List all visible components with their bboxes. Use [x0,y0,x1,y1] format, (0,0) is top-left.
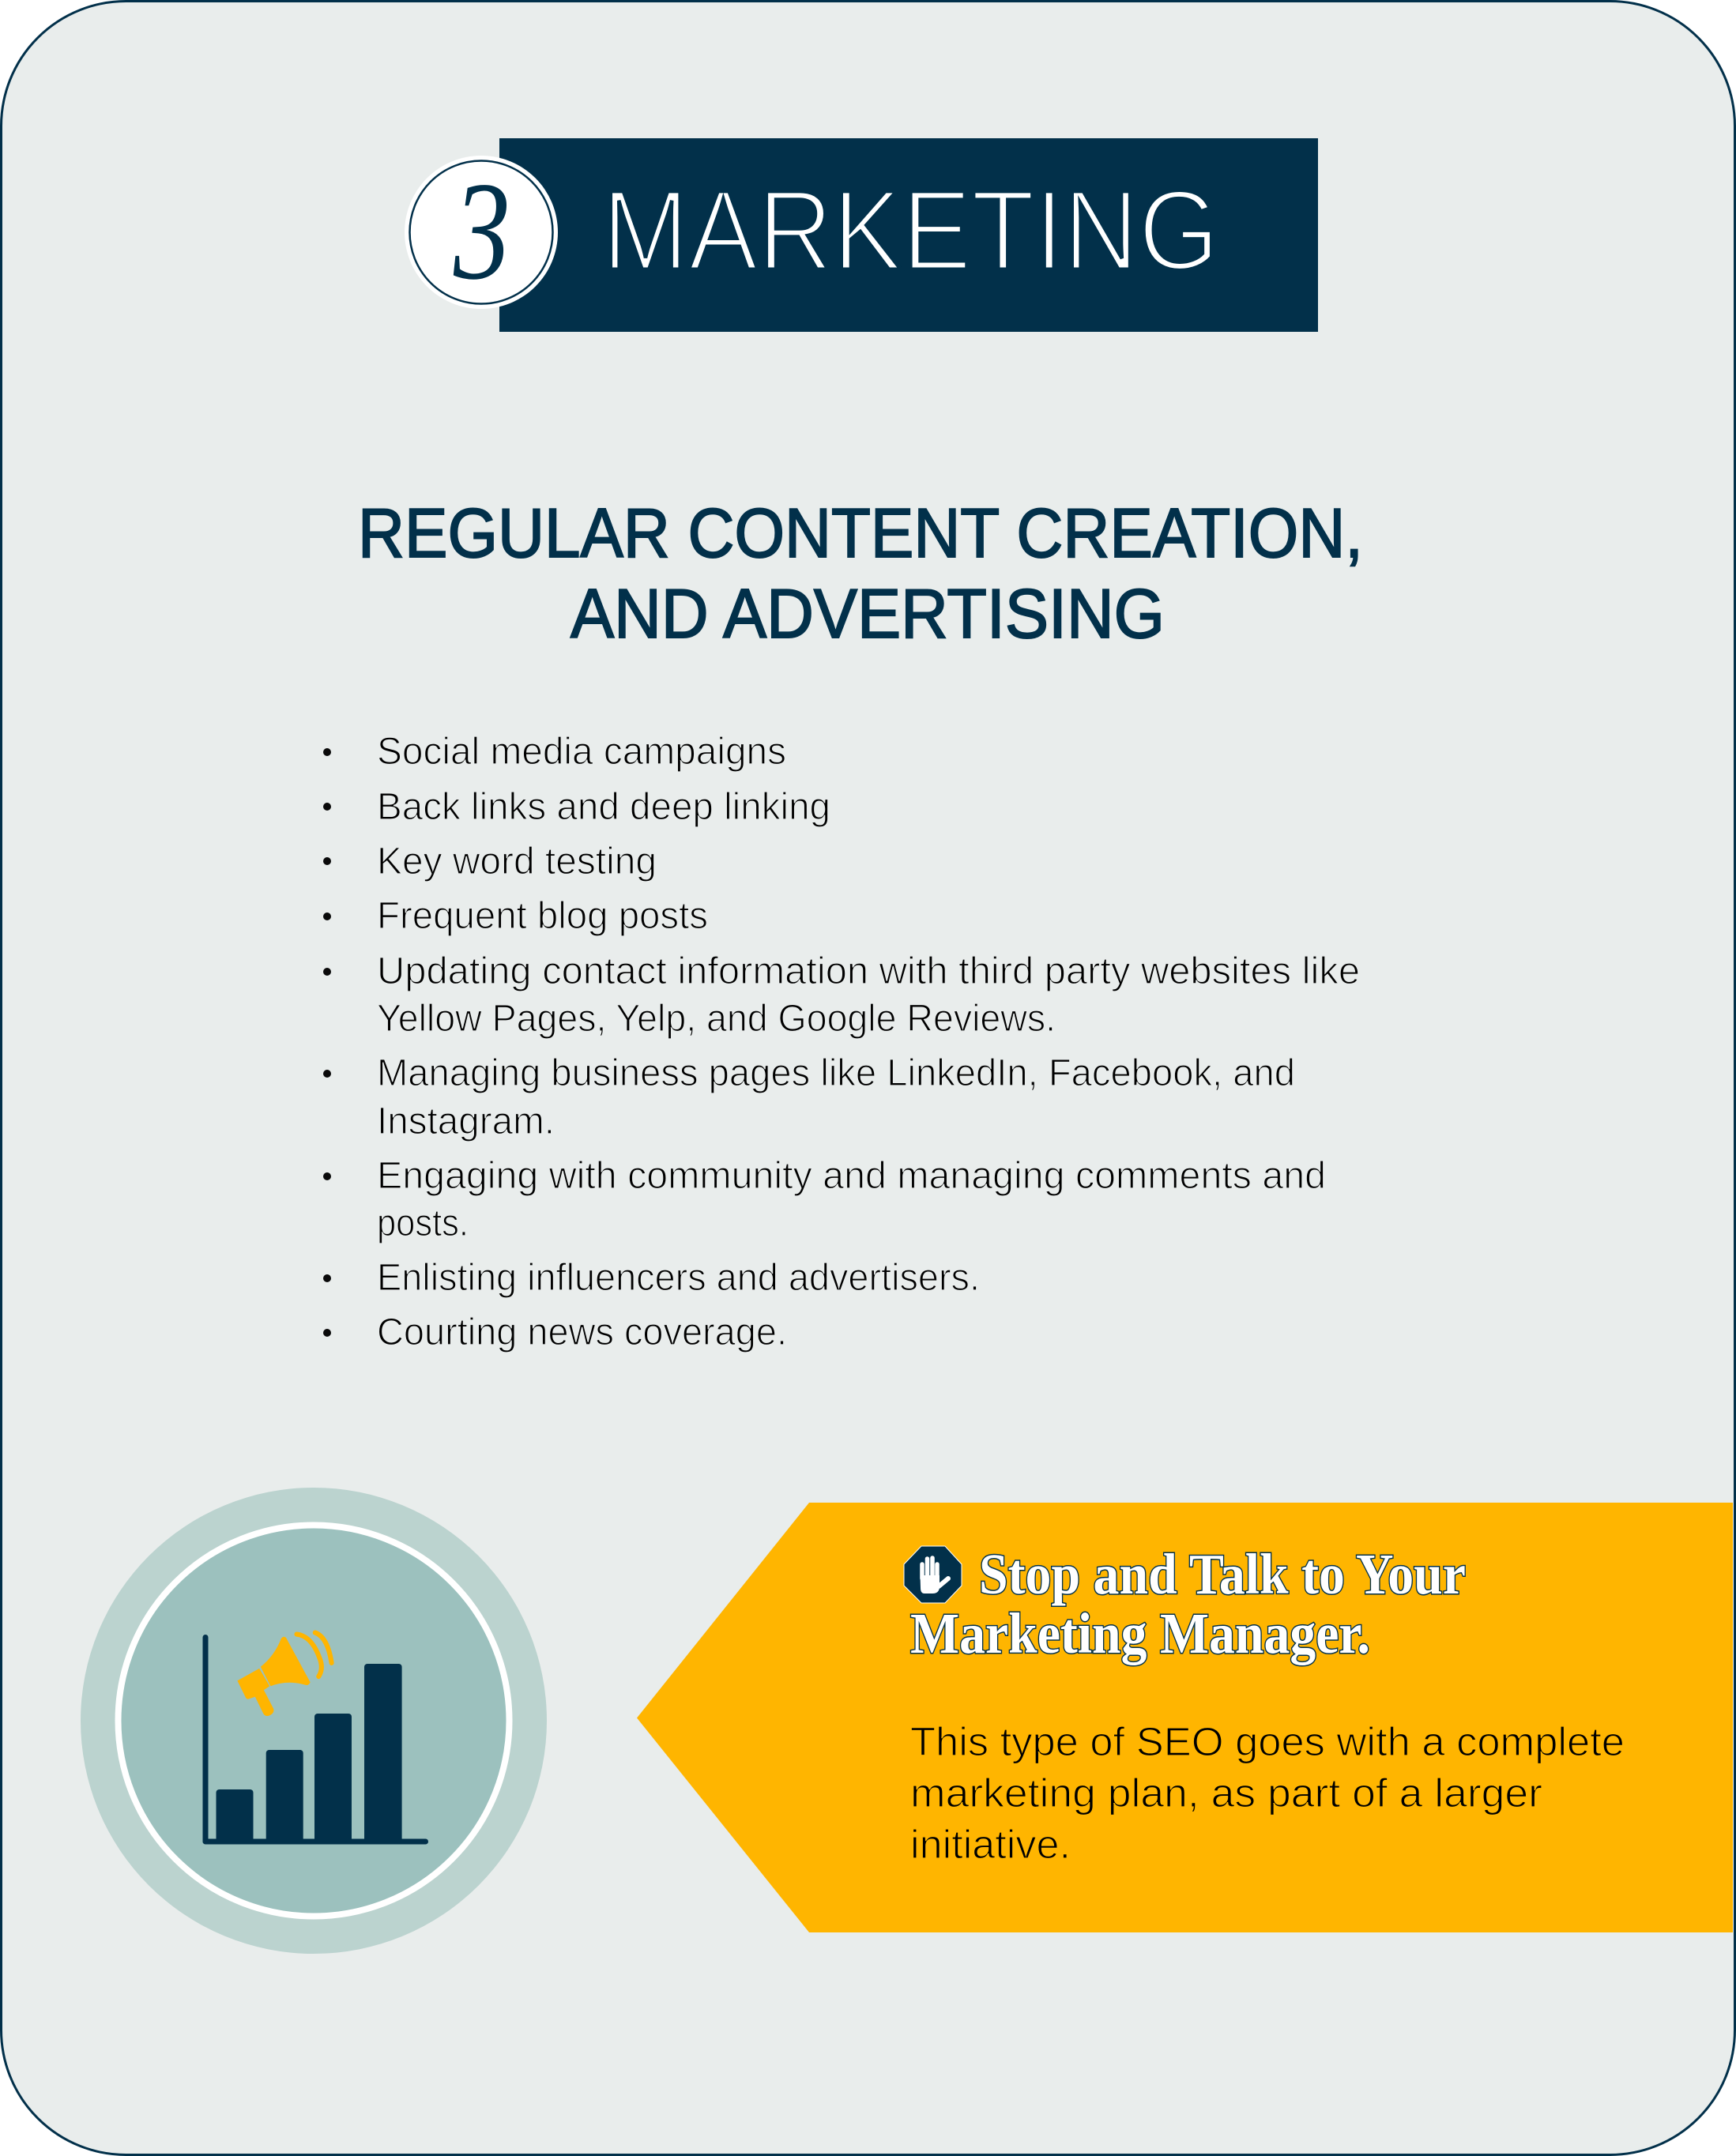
bullet list: Back links and deep linking [377,786,830,828]
number badge [405,152,558,309]
icon: stop hand [904,1546,962,1603]
callout body text: This type of SEO goes with a complete [910,1719,1625,1764]
bullet list: Key word testing [377,841,657,882]
bullet list: Yellow Pages, Yelp, and Google Reviews. [377,998,1056,1040]
bullet list: Engaging with community and managing comments and [377,1155,1326,1197]
bullet list [323,731,1360,1353]
icon: megaphone [237,1633,332,1716]
bullet list: Social media campaigns [377,731,786,773]
bullet list: posts. [377,1202,469,1244]
bullet list: Courting news coverage. [377,1311,787,1353]
callout body text: marketing plan, as part of a larger [910,1770,1542,1815]
callout title: Marketing Manager. [910,1601,1370,1665]
bullet list: Frequent blog posts [377,895,708,937]
banner title: MARKETING [602,167,1219,294]
callout title: Stop and Talk to Your [979,1542,1466,1606]
callout panel [637,1503,1733,1932]
icon: marketing chart medallion [81,1488,547,1954]
bullet list: Updating contact information with third party websites like [377,950,1360,992]
heading: REGULAR CONTENT CREATION, [358,494,1363,572]
number badge: 3 [453,152,510,309]
bullet list: Instagram. [377,1101,555,1142]
callout title [910,1542,1466,1665]
bar chart icon [202,1635,428,1844]
callout body text: initiative. [910,1822,1071,1867]
bullet list: Enlisting influencers and advertisers. [377,1257,980,1299]
bullet list: Managing business pages like LinkedIn, Facebook, and [377,1052,1295,1094]
heading [358,494,1363,653]
heading: AND ADVERTISING [571,574,1165,653]
callout body text [910,1719,1625,1867]
section header banner [405,138,1318,332]
